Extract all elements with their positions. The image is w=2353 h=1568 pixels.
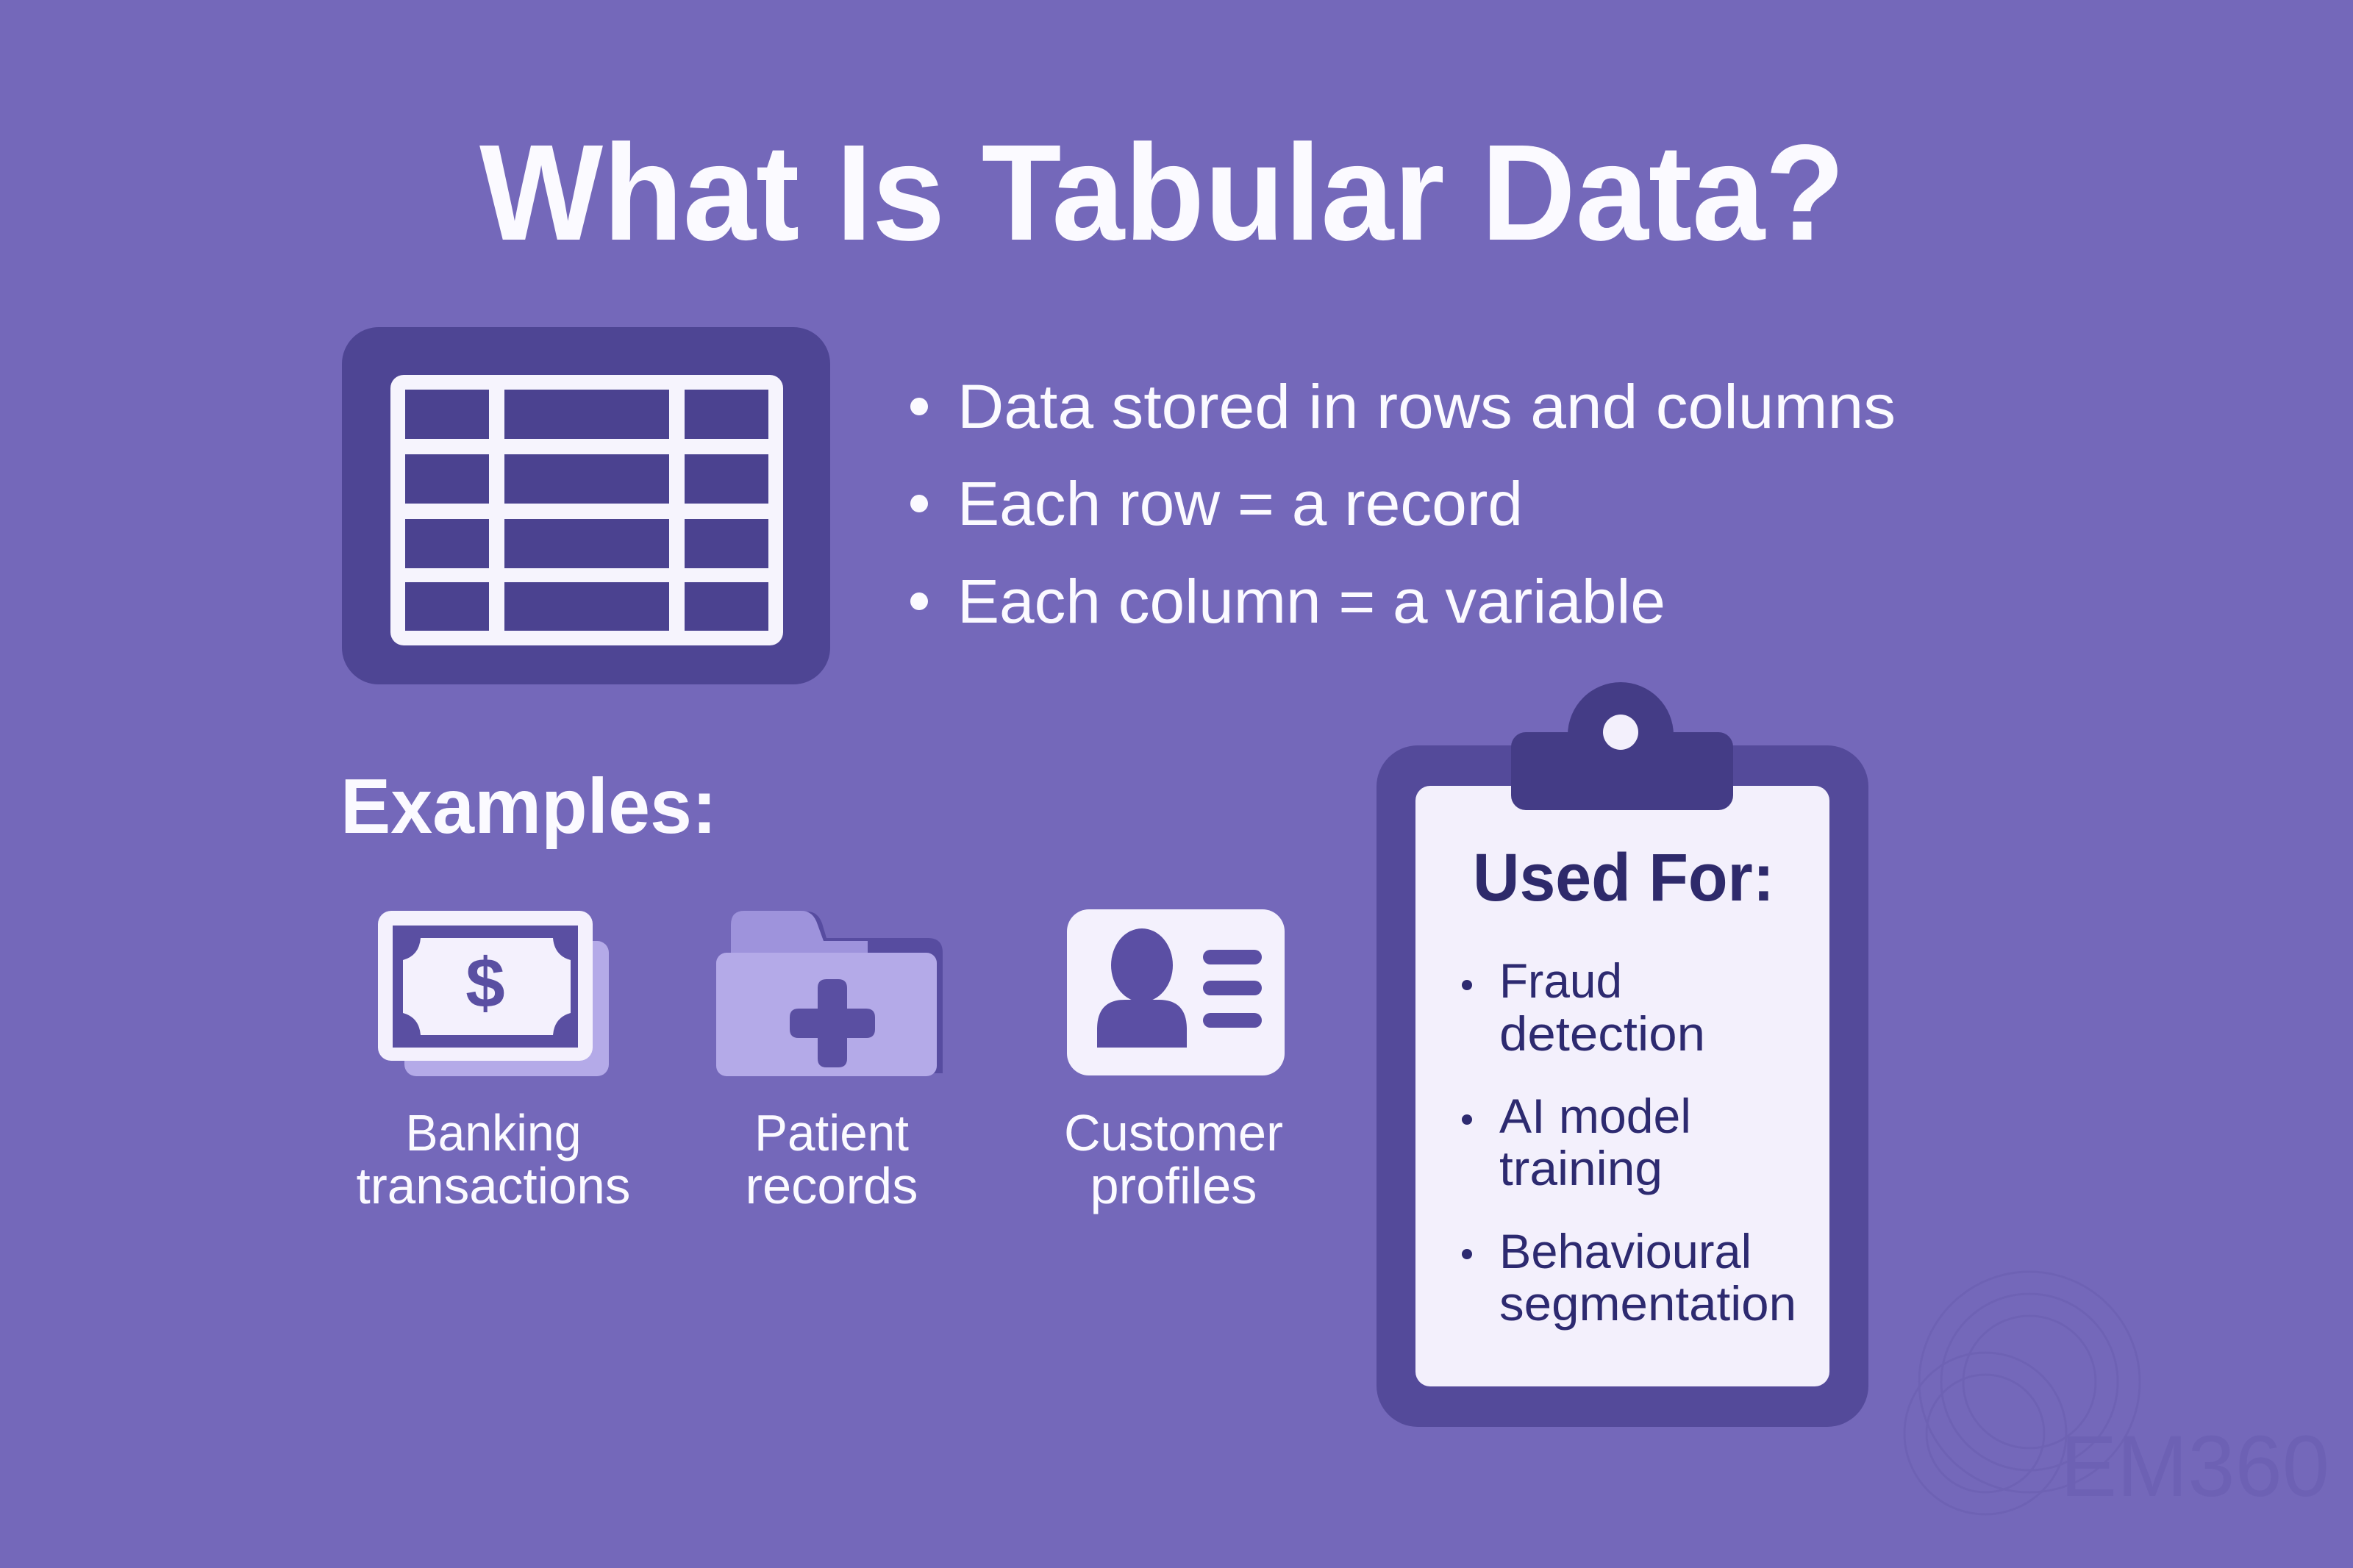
watermark: EM360 logo xyxy=(1904,1272,2329,1515)
label: banking transactions xyxy=(356,1104,631,1214)
label: banking transactions: Banking xyxy=(406,1104,581,1161)
title: What Is Tabular Data? xyxy=(479,117,1845,269)
bullet list: definition: Each row = a record xyxy=(957,469,1523,538)
icon: customer profile card xyxy=(1067,909,1285,1075)
panel: clipboard used for xyxy=(1377,682,1868,1427)
label: customer profiles: profiles xyxy=(1090,1157,1257,1214)
list: uses: Fraud xyxy=(1499,953,1622,1008)
heading: used for: Used For: xyxy=(1473,840,1774,915)
list: uses: segmentation xyxy=(1499,1276,1796,1331)
label: banking transactions: transactions xyxy=(356,1157,631,1214)
bullet list: definition: Each column = a variable xyxy=(957,567,1665,636)
list: uses: detection xyxy=(1499,1006,1705,1061)
icon: clip xyxy=(1511,682,1733,810)
label: patient records: records xyxy=(746,1157,918,1214)
bullet list: definition: Data stored in rows and columns xyxy=(957,372,1896,441)
label: patient records: Patient xyxy=(754,1104,909,1161)
list: uses: training xyxy=(1499,1141,1663,1195)
list: uses: AI model xyxy=(1499,1089,1691,1143)
watermark: EM360 logo: EM360 xyxy=(2060,1418,2329,1515)
label: customer profiles: Customer xyxy=(1064,1104,1283,1161)
list: uses: Behavioural xyxy=(1499,1224,1752,1278)
icon: banking: $ xyxy=(465,944,505,1023)
list: uses xyxy=(1462,953,1796,1331)
icon: patient folder xyxy=(716,911,943,1076)
icon: table panel xyxy=(342,327,830,684)
bullet list: definition xyxy=(910,372,1896,636)
heading: examples: Examples: xyxy=(340,763,717,850)
icon: banking xyxy=(378,911,609,1076)
label: patient records xyxy=(746,1104,918,1214)
label: customer profiles xyxy=(1064,1104,1283,1214)
